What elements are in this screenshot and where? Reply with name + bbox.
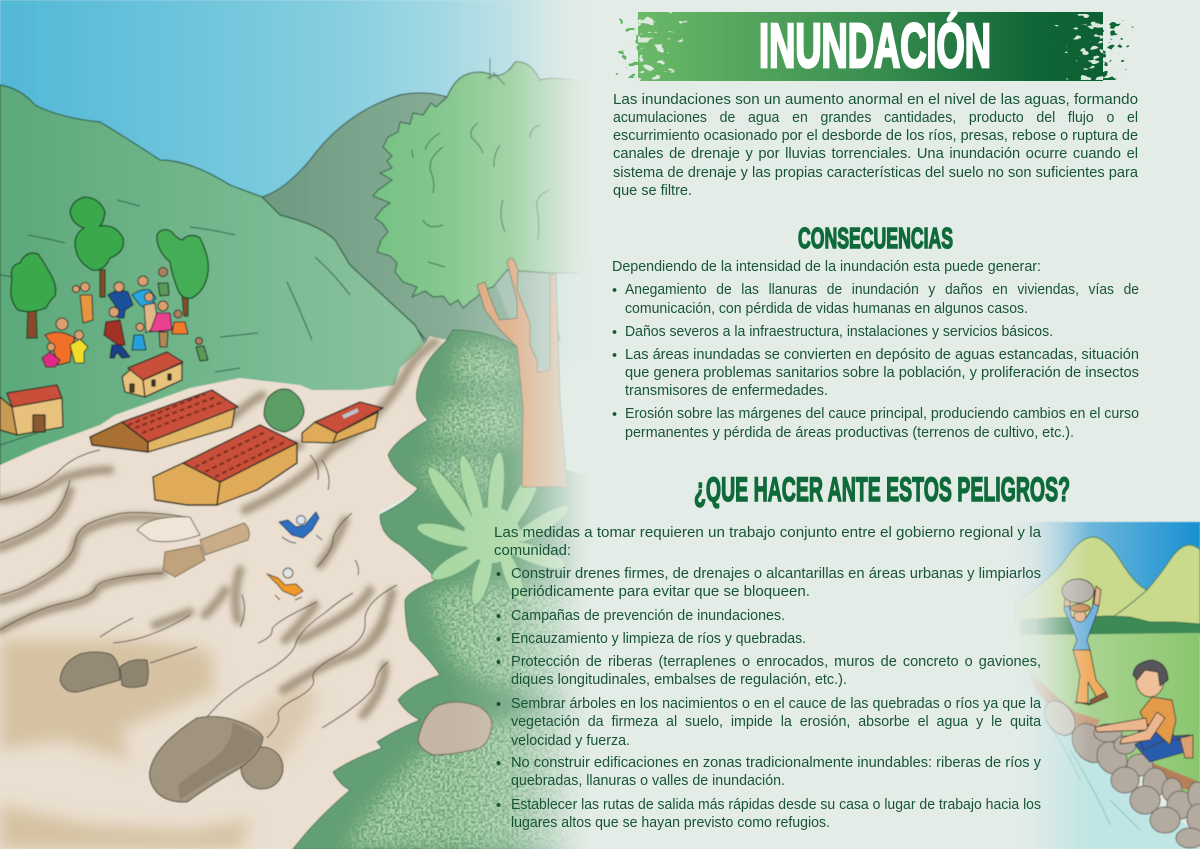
trees near people (11, 197, 208, 338)
intro text: escurrimiento ocasionado por el desborde de los ríos, presas, rebose o ruptura de (613, 128, 1138, 144)
consequences list: Anegamiento de las llanuras de inundación y daños en viviendas, vías de (625, 282, 1139, 298)
intro text: Las inundaciones son un aumento anormal en el nivel de las aguas, formando (613, 92, 1138, 108)
left scattered particles (604, 18, 638, 78)
hillside sketch lines (0, 200, 350, 445)
thin current lines (0, 450, 397, 738)
small tree in flood (264, 389, 304, 432)
consequences list: comunicación, con pérdida de vidas humanas en algunos casos. (625, 301, 1028, 317)
what-to-do list: Encauzamiento y limpieza de ríos y quebradas. (511, 631, 806, 647)
boulder middle (60, 652, 148, 692)
green hillside (0, 85, 426, 500)
consequences list: Dependiendo de la intensidad de la inundación esta puede generar: (612, 259, 1041, 275)
what-to-do list: Sembrar árboles en los nacimientos o en el cauce de las quebradas o ríos ya que la (511, 696, 1041, 712)
what-to-do list: Construir drenes firmes, de drenajes o alcantarillas en áreas urbanas y limpiarlos (511, 566, 1041, 582)
what-to-do list: periódicamente para evitar que se bloqueen. (511, 584, 810, 600)
consequences list: transmisores de enfermedades. (625, 383, 828, 399)
crown leaf marks (412, 58, 550, 267)
light flecks on banner, right (1045, 14, 1103, 80)
small sky (1015, 522, 1200, 632)
palm fronds (415, 451, 573, 607)
large tree: grey gap behind branches (490, 270, 558, 370)
intro text (613, 92, 1138, 199)
river water (1020, 665, 1200, 849)
what-to-do list: Protección de riberas (terraplenes o enrocados, muros de concreto o gaviones, (511, 654, 1041, 670)
light flecks on banner, left (638, 12, 704, 81)
ridge between hills (1113, 590, 1147, 617)
mud and flood water (0, 336, 447, 849)
consequences list (612, 259, 1139, 441)
what-to-do list: No construir edificaciones en zonas tradicionalmente inundables: riberas de ríos y (511, 755, 1042, 771)
upper soil edge (1027, 668, 1100, 730)
what-to-do list: velocidad y fuerza. (511, 733, 630, 749)
person in water, blue shirt (279, 512, 322, 543)
long house lower, flooded (153, 425, 297, 505)
what-to-do list: quebradas, llanuras o valles de inundación. (511, 773, 785, 789)
intro text: sistema de drenaje y las propias características del suelo no son suficientes para (613, 165, 1138, 181)
right scattered particles (1103, 18, 1146, 80)
hills (1015, 537, 1200, 625)
title banner (604, 12, 1146, 81)
person in water, orange shirt (267, 568, 303, 600)
water ripples (1025, 700, 1140, 830)
what-to-do list: vegetación da firmeza al suelo, impide la erosión, absorbe el agua y le quita (511, 714, 1041, 730)
intro text: acumulaciones de agua en grandes cantidades, producto del flujo o el (613, 110, 1138, 126)
long house upper (90, 390, 238, 452)
speckled light foliage (345, 344, 600, 849)
large tree crown (373, 62, 600, 308)
house far left (0, 385, 63, 435)
forest on right bank (293, 330, 600, 849)
banner title text: INUNDACIÓN (759, 12, 991, 81)
boy placing stones (1095, 660, 1193, 762)
what-to-do list: Campañas de prevención de inundaciones. (511, 608, 785, 624)
consequences list: Las áreas inundadas se convierten en depósito de aguas estancadas, situación (625, 347, 1139, 363)
blurred brown current streaks (0, 342, 435, 715)
intro text: que se filtre. (613, 183, 692, 199)
heading: consecuencias: CONSECUENCIAS (798, 223, 953, 255)
what-to-do list: lugares altos que se hayan previsto como refugios. (511, 815, 830, 831)
sediment patches (0, 640, 320, 849)
floating logs and debris (137, 517, 249, 577)
consequences list: permanentes y pérdida de áreas productivas (terrenos de cultivo, etc.). (625, 425, 1074, 441)
grey-green distant mountain (262, 93, 560, 372)
fade of illustration into page background (450, 0, 590, 849)
grass bank (1020, 633, 1200, 800)
fade of small illustration (1005, 515, 1090, 849)
lower soil edge (1150, 762, 1200, 795)
group of evacuated people (42, 268, 208, 367)
what-to-do list (494, 525, 1042, 831)
consequences list: Erosión sobre las márgenes del cauce principal, produciendo cambios en el curso (625, 406, 1139, 422)
stone wall (1038, 695, 1200, 848)
what-to-do list: comunidad: (494, 543, 571, 559)
boulders lower (150, 716, 283, 802)
house near people (122, 352, 183, 397)
boulder on bank (418, 702, 492, 755)
consequences list: que genera problemas sanitarios sobre la población, y proliferación de insectos (625, 365, 1139, 381)
sky (0, 0, 600, 360)
what-to-do list: diques longitudinales, embalses de regulación, etc.). (511, 672, 847, 688)
what-to-do list: Las medidas a tomar requieren un trabajo conjunto entre el gobierno regional y la (494, 525, 1041, 541)
what-to-do list: Establecer las rutas de salida más rápidas desde su casa o lugar de trabajo hacia los (511, 797, 1041, 813)
illustration: flooded valley scene (0, 0, 600, 849)
illustration: people reinforcing a river bank (1015, 522, 1200, 849)
large tree trunk (477, 258, 567, 487)
small house flooded right (302, 402, 383, 443)
man carrying a rock (1062, 579, 1108, 705)
hedge strip (1020, 616, 1200, 636)
consequences list: Daños severos a la infraestructura, instalaciones y servicios básicos. (625, 324, 1053, 340)
green banner bar (638, 12, 1103, 81)
intro text: canales de drenaje y por lluvias torrenciales. Una inundación ocurre cuando el (613, 146, 1138, 162)
